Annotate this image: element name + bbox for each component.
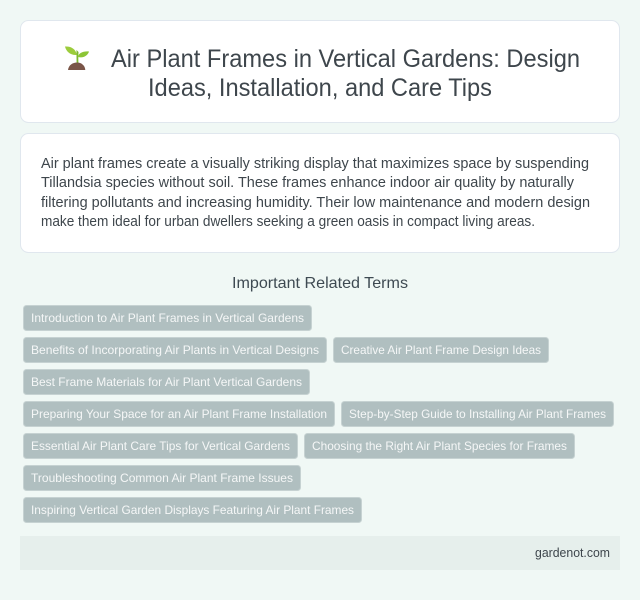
tag: [24, 370, 310, 394]
tag: [24, 306, 312, 330]
tag: [334, 338, 548, 362]
footer: [20, 536, 620, 570]
tag: Best Frame Materials for Air Plant Vertical Gardens: [31, 375, 302, 389]
title: Ideas, Installation, and Care Tips: [148, 74, 492, 102]
tag: Inspiring Vertical Garden Displays Featuring Air Plant Frames: [31, 503, 354, 517]
title: [111, 45, 580, 102]
heading: related terms: Important Related Terms: [232, 275, 408, 292]
tag: Benefits of Incorporating Air Plants in Vertical Designs: [31, 343, 319, 357]
tag: [24, 498, 362, 522]
tag: Choosing the Right Air Plant Species for Frames: [312, 439, 567, 453]
tag: [342, 402, 614, 426]
title: Air Plant Frames in Vertical Gardens: Design: [111, 45, 580, 73]
tag: [304, 434, 574, 458]
tag: Troubleshooting Common Air Plant Frame Issues: [31, 471, 293, 485]
panel: intro paragraph: [20, 134, 620, 252]
panel: intro paragraph: Tillandsia species without soil. These frames enhance indoor air quality by naturally: [41, 175, 575, 191]
tag: [24, 402, 334, 426]
panel: intro paragraph: Air plant frames create a visually striking display that maximizes space by suspending: [41, 156, 589, 172]
tag: [24, 434, 298, 458]
icon: seedling: [65, 46, 89, 70]
panel: intro paragraph: filtering pollutants and increasing humidity. Their low maintenance and modern design: [41, 195, 590, 211]
tag: Preparing Your Space for an Air Plant Frame Installation: [31, 407, 327, 421]
footer: gardenot.com: [535, 546, 610, 560]
tag: Introduction to Air Plant Frames in Vertical Gardens: [31, 311, 304, 325]
tag: Step-by-Step Guide to Installing Air Plant Frames: [349, 407, 606, 421]
tag list: [24, 306, 614, 522]
tag: Creative Air Plant Frame Design Ideas: [341, 343, 541, 357]
tag: Essential Air Plant Care Tips for Vertical Gardens: [31, 439, 290, 453]
panel: intro paragraph: make them ideal for urban dwellers seeking a green oasis in compact living areas.: [41, 214, 535, 230]
tag: [24, 338, 326, 362]
panel: title card: [20, 20, 620, 122]
tag: [24, 466, 300, 490]
